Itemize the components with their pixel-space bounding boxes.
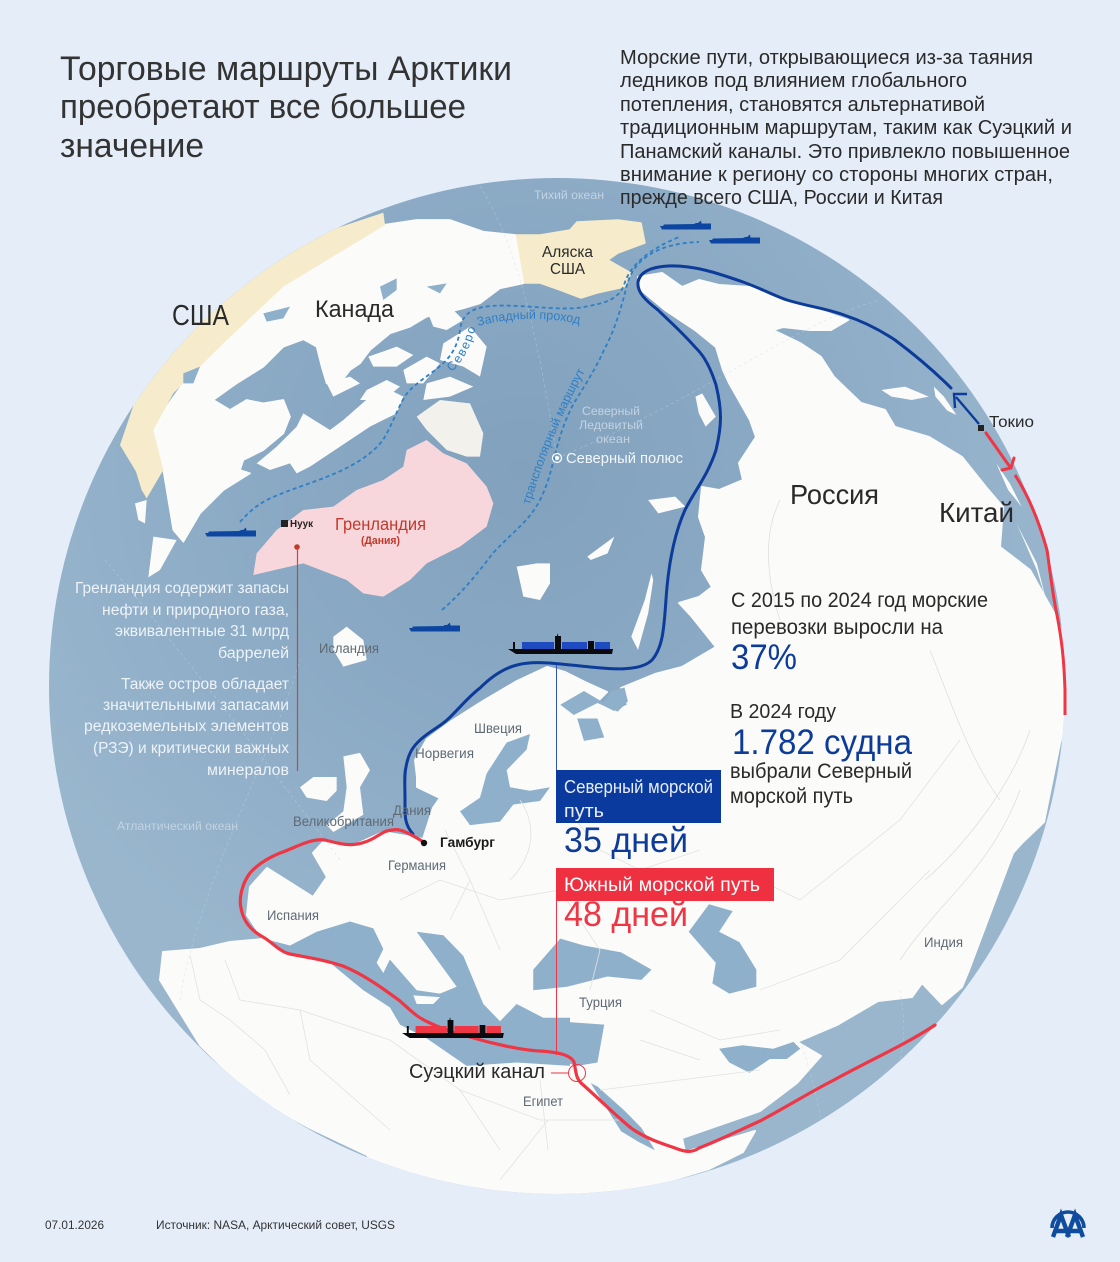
- inland lakes Canada: [183, 278, 447, 383]
- arrow: north route to Tokyo: [954, 394, 979, 424]
- water: inland seas: [263, 688, 800, 1150]
- stat: traffic growth: С 2015 по 2024 год морские: [731, 589, 988, 612]
- Greenland text block: [75, 580, 289, 779]
- Greenland text block: значительными запасами: [103, 697, 289, 714]
- map labels: oceans: Северный: [582, 404, 640, 418]
- intro paragraph: традиционным маршрутам, таким как Суэцкий и: [620, 117, 1072, 139]
- map labels: oceans: Атлантический океан: [117, 819, 238, 833]
- stat: ships 2024: [730, 701, 912, 808]
- Red Sea: [591, 1083, 655, 1150]
- intro paragraph: Морские пути, открывающиеся из-за таяния: [620, 47, 1033, 69]
- Greenland connector: [294, 544, 300, 771]
- callout: Southern Sea Route: Южный морской путь: [564, 875, 760, 896]
- Persian Gulf: [719, 1042, 800, 1073]
- stat: ships 2024: морской путь: [730, 785, 853, 808]
- logo: AA: [1052, 1212, 1084, 1237]
- intro paragraph: Панамский каналы. Это привлекло повышенное: [620, 141, 1070, 163]
- Svalbard: [517, 563, 550, 600]
- route: Northern Sea Route: [405, 266, 951, 834]
- map labels: oceans: океан: [596, 432, 630, 446]
- borders: [190, 740, 960, 1180]
- land: Canada: [120, 213, 550, 667]
- land: USA: [120, 213, 385, 498]
- Arctic islands: [327, 327, 487, 400]
- Greenland text block: (РЗЭ) и критически важных: [93, 740, 289, 757]
- Black Sea: [533, 939, 652, 990]
- intro paragraph: ледников под влиянием глобального: [620, 70, 967, 92]
- White Sea: [560, 688, 628, 741]
- callout: Northern Sea Route: Северный морской: [564, 777, 713, 797]
- connector: north route: [556, 665, 558, 770]
- map labels: countries: Аляска: [542, 244, 593, 261]
- intro paragraph: прежде всего США, России и Китая: [620, 187, 943, 209]
- callout: Northern Sea Route: [556, 770, 721, 860]
- ship: container vessel north: [508, 633, 613, 654]
- Greenland text block: баррелей: [218, 645, 289, 662]
- stat: ships 2024: 1.782 судна: [732, 723, 912, 762]
- Greenland text block: Также остров обладает: [121, 676, 289, 693]
- map labels: minor countries: Дания: [393, 803, 431, 818]
- map labels: countries: Суэцкий канал: [409, 1061, 545, 1083]
- route: transpolar dashed: [442, 242, 699, 610]
- Nuuk marker: Нуук: [290, 519, 314, 530]
- route labels: [448, 310, 584, 504]
- map labels: minor countries: Швеция: [474, 721, 522, 736]
- title: значение: [60, 127, 204, 165]
- map labels: countries: США: [550, 261, 586, 278]
- stat: ships 2024: выбрали Северный: [730, 760, 912, 783]
- footer: date: 07.01.2026: [45, 1220, 104, 1232]
- map labels: oceans: Тихий океан: [534, 188, 604, 202]
- Greenland label: Гренландия: [335, 514, 426, 534]
- ship: Labrador Sea: [205, 528, 256, 536]
- stat: traffic growth: 37%: [731, 638, 797, 677]
- map labels: countries: США: [172, 300, 230, 332]
- title: преобретают все большее: [60, 88, 466, 126]
- connector: south route: [556, 900, 558, 1055]
- Arctic Russia islands: [540, 387, 1047, 650]
- map labels: oceans: [117, 188, 643, 833]
- Baltic: [460, 734, 550, 825]
- title: [60, 50, 512, 165]
- map labels: countries: Токио: [989, 414, 1034, 431]
- map labels: minor countries: Индия: [924, 935, 963, 950]
- map labels: minor countries: Германия: [388, 858, 446, 873]
- ship: container vessel south: [402, 1017, 504, 1038]
- map labels: countries: Китай: [939, 497, 1014, 528]
- Britain and Ireland: [300, 753, 440, 1004]
- Caspian: [689, 904, 756, 994]
- route labels: Северо: [448, 327, 475, 370]
- callout: Northern Sea Route: путь: [564, 801, 604, 821]
- route labels: Западный проход: [477, 310, 580, 326]
- ship: Bering lower: [709, 234, 760, 244]
- globe map: [49, 178, 1075, 1240]
- stat: traffic growth: перевозки выросли на: [731, 616, 943, 639]
- North Pole marker: Северный полюс: [566, 450, 683, 467]
- intro paragraph: внимание к региону со стороны многих стран,: [620, 164, 1053, 186]
- map labels: minor countries: Исландия: [319, 641, 379, 656]
- map labels: countries: Россия: [790, 479, 879, 510]
- route: Southern Sea Route (Pacific): [986, 433, 1014, 470]
- footer: source: Источник: NASA, Арктический совет, USGS: [156, 1220, 395, 1232]
- callout: Southern Sea Route: 48 дней: [564, 895, 688, 934]
- Greenland text block: Гренландия содержит запасы: [75, 580, 289, 597]
- map labels: minor countries: [267, 641, 963, 1109]
- callout: Northern Sea Route: 35 дней: [564, 821, 688, 860]
- land: Alaska: [515, 220, 645, 298]
- map labels: oceans: Ледовитый: [579, 418, 643, 432]
- route: northwest passage dashed: [240, 237, 679, 522]
- intro paragraph: потепления, становятся альтернативой: [620, 94, 985, 116]
- Greenland text block: нефти и природного газа,: [102, 602, 289, 619]
- map labels: minor countries: Египет: [523, 1094, 563, 1109]
- land masses: [105, 186, 1075, 1240]
- Hamburg marker and label: Гамбург: [440, 834, 495, 850]
- Suez marker: [551, 1064, 586, 1082]
- Greenland text block: редкоземельных элементов: [84, 718, 289, 735]
- Greenland: [253, 440, 493, 597]
- Mediterranean west and east: [263, 921, 570, 1066]
- map labels: countries: [172, 244, 1034, 1083]
- Greenland label: (Дания): [361, 535, 400, 547]
- stat: ships 2024: В 2024 году: [730, 701, 836, 723]
- Greenland text block: эквивалентные 31 млрд: [115, 623, 289, 640]
- map labels: minor countries: Испания: [267, 908, 319, 923]
- ocean: [49, 178, 1065, 1194]
- Greenland label: [335, 514, 426, 547]
- map labels: countries: Канада: [315, 296, 395, 323]
- Iceland: [333, 627, 367, 667]
- map labels: minor countries: Турция: [579, 995, 622, 1010]
- route: Southern Sea Route (Suez): [240, 830, 935, 1151]
- Baffin: [257, 390, 403, 473]
- ship: Bering top: [660, 220, 711, 230]
- callout: Southern Sea Route: [556, 868, 774, 934]
- Tokyo marker: [978, 425, 984, 431]
- Greenland text block: минералов: [207, 762, 289, 779]
- map labels: minor countries: Норвегия: [415, 746, 474, 761]
- Newfoundland: [135, 500, 177, 577]
- route labels: трансполярный маршрут: [524, 368, 584, 504]
- map labels: minor countries: Великобритания: [293, 814, 394, 829]
- intro paragraph: [620, 47, 1072, 209]
- ship: north Atlantic: [409, 622, 460, 632]
- title: Торговые маршруты Арктики: [60, 50, 512, 88]
- land: Eurasia and Africa: [160, 273, 1075, 1240]
- graticule: [105, 186, 904, 1170]
- stat: traffic growth: [731, 589, 988, 677]
